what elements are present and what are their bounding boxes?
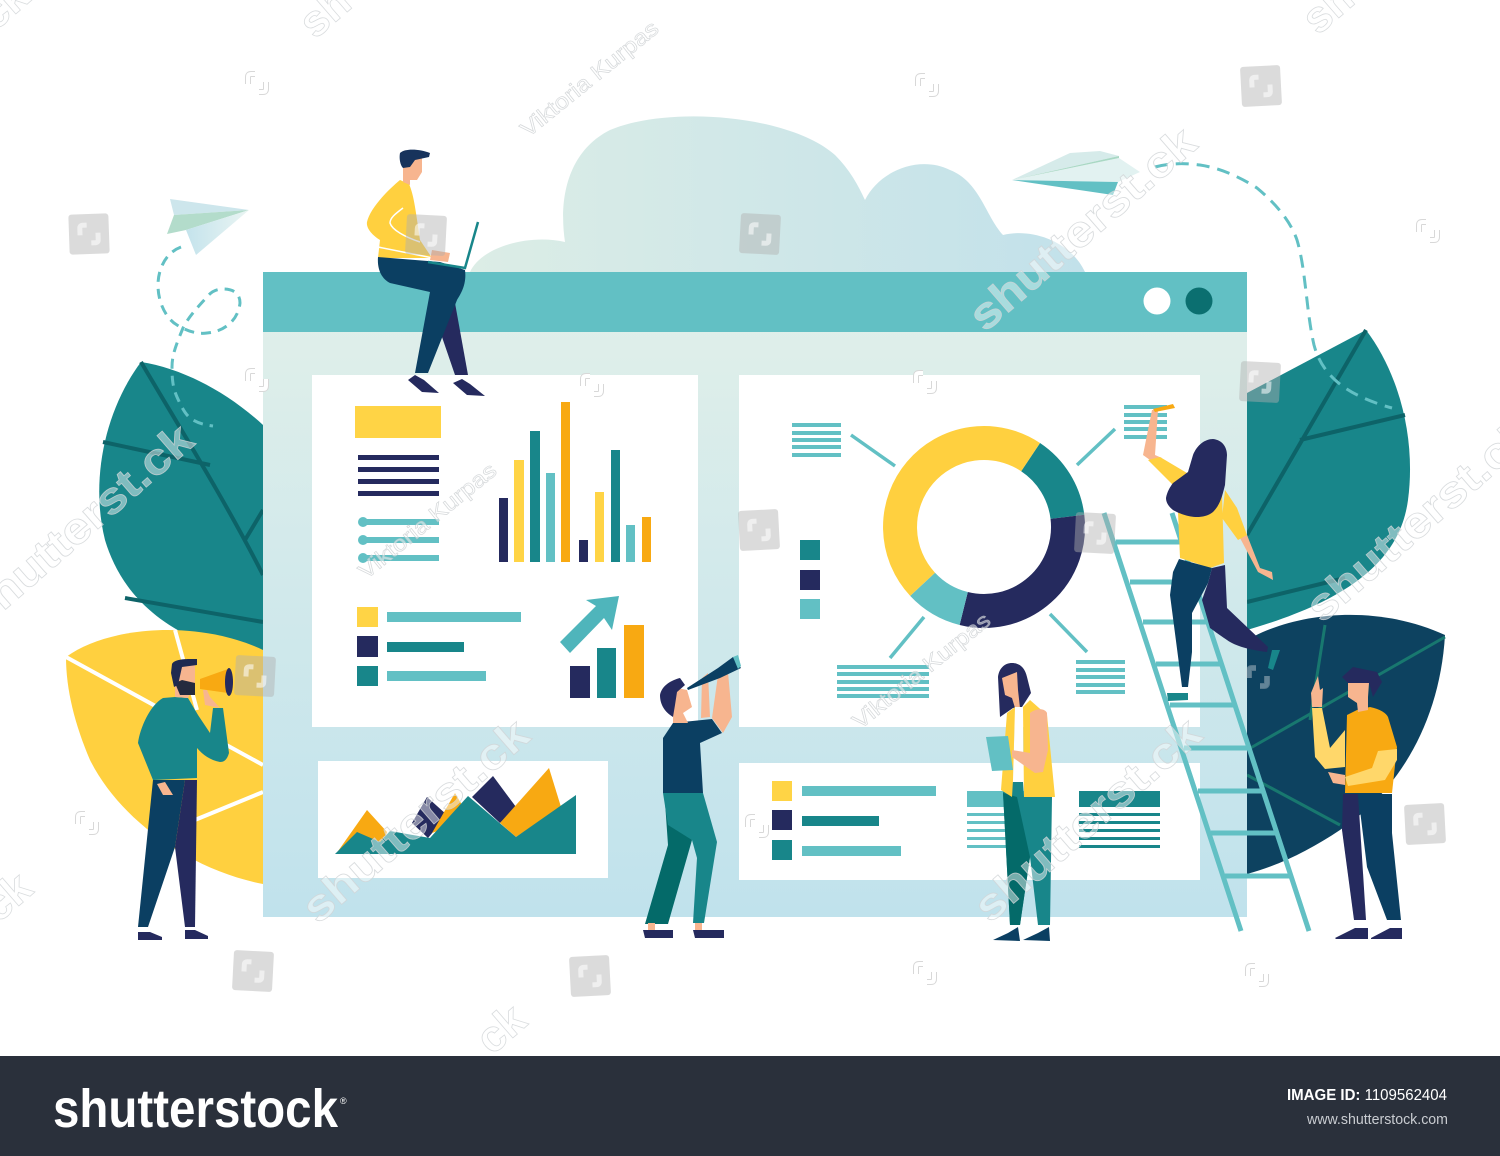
legend rows bbox=[772, 781, 936, 860]
head bbox=[403, 157, 422, 185]
leaf: yellow bbox=[66, 630, 263, 884]
head bbox=[1348, 683, 1369, 712]
window button white bbox=[1144, 288, 1170, 314]
left sleeve bbox=[1312, 708, 1345, 769]
table: dark bbox=[1079, 791, 1160, 848]
text block: upper right bbox=[1124, 405, 1167, 439]
raised arm bbox=[1143, 410, 1162, 460]
panel: donut chart bbox=[739, 375, 1200, 727]
ankles and shoes bbox=[648, 923, 702, 930]
pencil bbox=[1153, 404, 1175, 412]
figure: man with telescope bbox=[643, 655, 741, 938]
cloud bbox=[470, 116, 1085, 272]
text block: lower right bbox=[1076, 660, 1125, 694]
shoes bbox=[408, 375, 485, 396]
watermark small marks bbox=[78, 74, 1437, 984]
heading block bbox=[355, 406, 441, 438]
trousers bbox=[138, 780, 185, 927]
figure: woman with tablet bbox=[986, 663, 1055, 941]
watermark text: ck bbox=[466, 994, 536, 1064]
right forearm bbox=[1345, 749, 1397, 786]
front leg bbox=[1170, 559, 1212, 687]
figure: man with raised finger bbox=[1311, 667, 1402, 939]
icon: right paper plane bbox=[1012, 151, 1140, 195]
hair bbox=[998, 663, 1031, 717]
watermark text: shutterst.ck bbox=[959, 117, 1206, 341]
shirt bbox=[663, 719, 722, 793]
back leg bbox=[430, 292, 468, 375]
watermark author: Viktoria Kurpas bbox=[515, 15, 663, 142]
watermark text: shutterst.ck bbox=[292, 709, 539, 933]
slider rows bbox=[358, 517, 439, 563]
hair bbox=[1166, 439, 1227, 517]
dashed path: right plane bbox=[1155, 164, 1392, 408]
growth bars with arrow bbox=[560, 596, 644, 698]
hands bbox=[1311, 676, 1345, 785]
icon: left paper plane bbox=[167, 199, 249, 255]
trousers bbox=[1003, 782, 1052, 925]
arms bbox=[701, 672, 732, 733]
panel: bottom right bbox=[739, 763, 1200, 880]
figure: man with megaphone bbox=[138, 659, 233, 940]
ladder bbox=[1104, 513, 1309, 931]
tablet bbox=[986, 736, 1013, 771]
watermark author: Viktoria Kurpas bbox=[847, 607, 995, 734]
leaf: left teal bbox=[99, 362, 263, 660]
image id: IMAGE ID: 1109562404 bbox=[1287, 1087, 1447, 1104]
face bbox=[1002, 672, 1020, 708]
front leg bbox=[378, 257, 465, 373]
watermark squares bbox=[68, 65, 1446, 997]
leaf: right teal bbox=[1247, 330, 1410, 630]
arm bbox=[1012, 709, 1048, 773]
figure: man on top with laptop bbox=[367, 150, 485, 396]
window header bar bbox=[263, 272, 1247, 332]
telescope bbox=[687, 657, 741, 690]
window button teal bbox=[1186, 288, 1212, 314]
bar chart bbox=[499, 402, 651, 562]
footer logo: shutterstock bbox=[53, 1079, 339, 1139]
site url: www.shutterstock.com bbox=[1306, 1112, 1448, 1128]
figure: woman on ladder bbox=[1143, 404, 1280, 701]
vest bbox=[1001, 700, 1055, 797]
watermark author: Viktoria Kurpas bbox=[353, 457, 501, 584]
browser window bbox=[263, 272, 1247, 917]
megaphone bbox=[200, 669, 228, 693]
donut leader lines bbox=[851, 429, 1115, 658]
shirt and sleeves bbox=[1148, 457, 1247, 540]
head bbox=[175, 663, 195, 698]
forearm right bbox=[1240, 535, 1273, 580]
dashed path: left plane bbox=[158, 247, 240, 426]
watermark author bbox=[353, 15, 995, 734]
legend bbox=[357, 607, 521, 686]
sweater bbox=[367, 180, 432, 258]
hands bbox=[157, 690, 220, 795]
panel: top left charts bbox=[312, 375, 698, 727]
watermark text: shutterst.ck bbox=[964, 708, 1211, 932]
text block: upper left bbox=[792, 423, 841, 457]
shoes bbox=[138, 930, 208, 940]
donut bbox=[900, 443, 1068, 611]
sweater bbox=[138, 697, 229, 780]
sweater bbox=[1345, 707, 1397, 793]
trousers bbox=[645, 802, 692, 924]
table: light bbox=[967, 791, 1048, 848]
text lines bbox=[358, 455, 439, 496]
registered mark: ® bbox=[340, 1096, 347, 1106]
laptop bbox=[428, 222, 478, 268]
panel: area chart bbox=[318, 761, 608, 878]
donut legend bbox=[800, 540, 820, 619]
shoes bbox=[993, 927, 1050, 941]
white shirt bbox=[1013, 707, 1023, 782]
footer bar bbox=[0, 1056, 1500, 1156]
shoes bbox=[1335, 928, 1402, 939]
leaf: dark navy bbox=[1247, 615, 1445, 874]
shoes bbox=[1167, 650, 1280, 701]
head bbox=[673, 688, 692, 723]
back leg bbox=[1202, 565, 1268, 652]
trousers bbox=[1342, 794, 1366, 920]
hand bbox=[430, 250, 450, 262]
text block: lower left bbox=[837, 665, 929, 698]
